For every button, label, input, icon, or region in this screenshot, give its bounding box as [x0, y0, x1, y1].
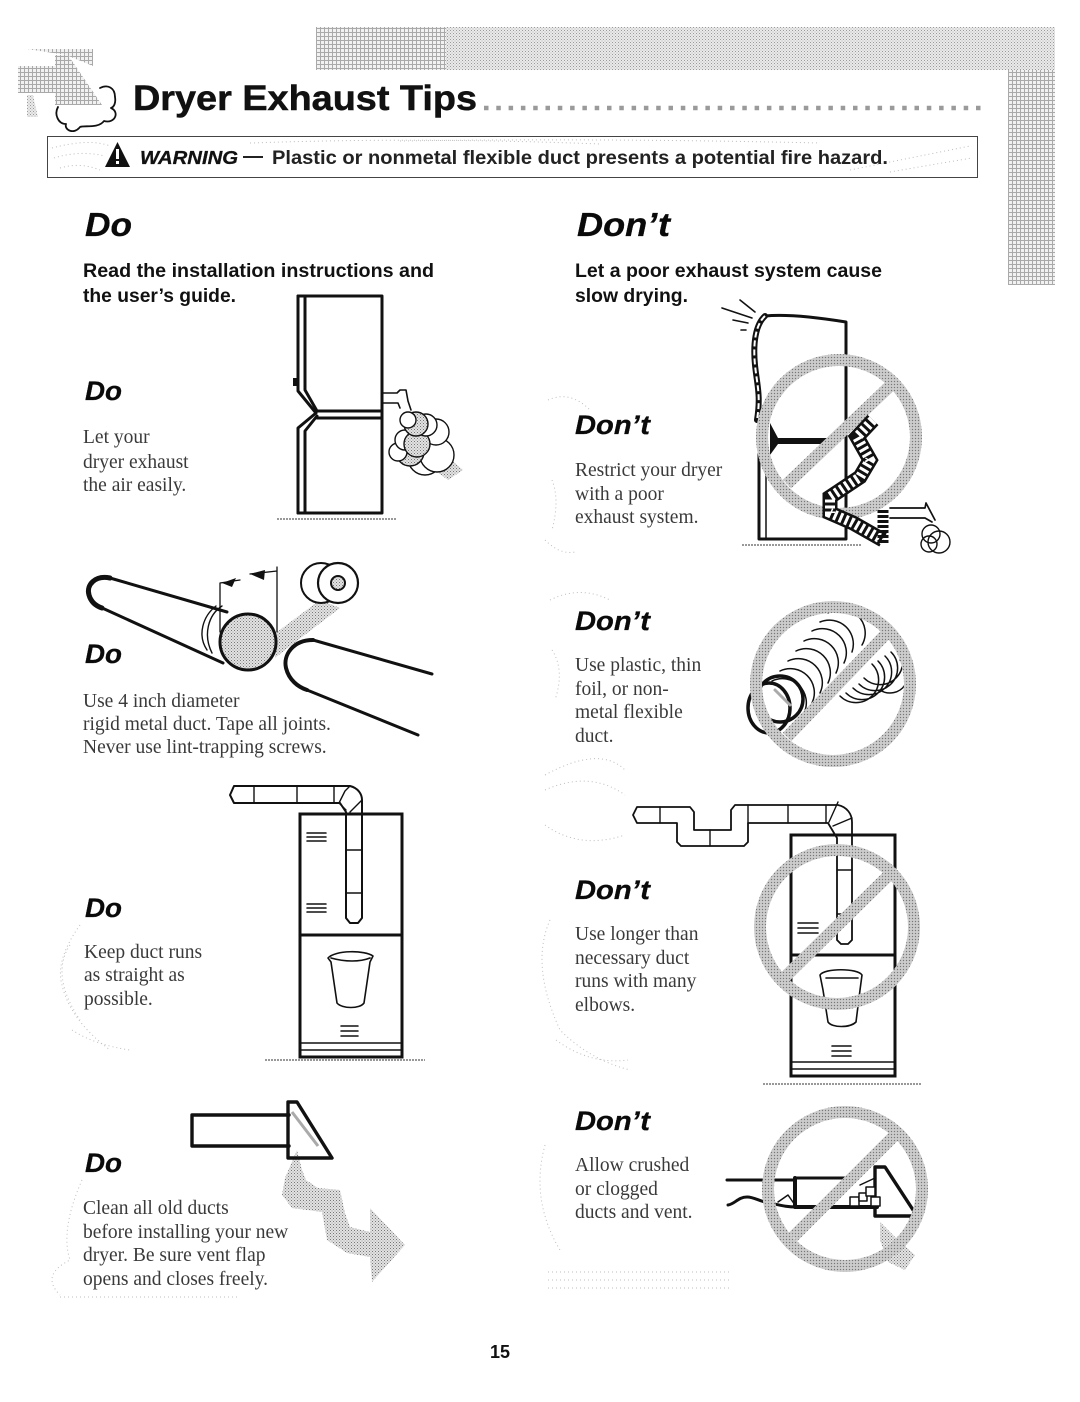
illustration: restricted hose and vent — [830, 420, 950, 553]
text block: Use longer than — [575, 924, 698, 945]
title: Dryer Exhaust Tips — [133, 79, 477, 118]
text block: duct. — [575, 726, 613, 747]
icon: prohibition sign — [756, 607, 910, 761]
heading: Do — [85, 376, 122, 406]
subheading: do column — [83, 261, 434, 307]
illustration: dryer with straight duct — [230, 786, 425, 1060]
text block: dryer. Be sure vent flap — [83, 1245, 265, 1266]
text block: rigid metal duct. Tape all joints. — [83, 714, 331, 735]
text block: as straight as — [84, 965, 185, 986]
panel: do clean ducts — [52, 1102, 405, 1297]
warning label: WARNING — [140, 148, 238, 168]
text block: Keep duct runs — [84, 942, 202, 963]
text block: Use plastic, thin — [575, 655, 701, 676]
panel: do keep ducts straight — [60, 786, 425, 1060]
subheading: don't column — [575, 261, 882, 307]
text block: exhaust system. — [575, 507, 698, 528]
page number: 15 — [490, 1342, 510, 1362]
icon: prohibition sign — [762, 360, 916, 514]
panel: don't use flexible duct — [550, 592, 910, 761]
text block: Restrict your dryer — [575, 460, 722, 481]
heading: Do — [85, 639, 122, 669]
subheading: do column: Read the installation instructions and — [83, 261, 434, 282]
icon: prohibition sign — [768, 1112, 922, 1266]
header band — [316, 27, 1055, 285]
panel: don't restrict — [545, 300, 950, 553]
heading: Don’t — [575, 1106, 651, 1136]
text block: runs with many — [575, 971, 697, 992]
subheading: do column: the user’s guide. — [83, 286, 236, 307]
warning dash — [243, 156, 263, 158]
heading: Don’t — [575, 410, 651, 440]
heading: Don't: Don’t — [577, 206, 672, 243]
text block: dryer exhaust — [83, 452, 189, 473]
illustration: dryer with elbow duct — [633, 802, 922, 1084]
icon: warning triangle — [105, 142, 130, 167]
illustration: dryer with vent — [277, 296, 463, 519]
text block: ducts and vent. — [575, 1202, 693, 1223]
dotted leader — [484, 106, 985, 110]
panel: do use rigid duct — [83, 563, 432, 758]
heading: Do — [85, 1148, 122, 1178]
text block: the air easily. — [83, 475, 186, 496]
text block: metal flexible — [575, 702, 683, 723]
illustration: dryer — [722, 300, 862, 545]
text block: before installing your new — [83, 1222, 288, 1243]
text block: Clean all old ducts — [83, 1198, 229, 1219]
panel: don't use long ducts — [542, 759, 922, 1084]
text block: with a poor — [575, 484, 664, 505]
text block: foil, or non- — [575, 679, 669, 700]
subheading: don't column: Let a poor exhaust system cause — [575, 261, 882, 282]
text block: Use 4 inch diameter — [83, 691, 240, 712]
subheading: don't column: slow drying. — [575, 286, 688, 307]
panel: do let air out — [83, 296, 463, 519]
illustration: vent and air arrow — [192, 1102, 405, 1282]
text block: necessary duct — [575, 948, 690, 969]
heading: Do: Do — [85, 206, 132, 243]
text block: or clogged — [575, 1179, 658, 1200]
heading: Do — [85, 893, 122, 923]
text block: Let your — [83, 427, 150, 448]
icon: vent with cloud — [18, 49, 116, 131]
panel: don't allow crushed ducts — [540, 1106, 922, 1288]
icon: prohibition sign — [760, 850, 914, 1004]
text block: opens and closes freely. — [83, 1269, 268, 1290]
illustration: flexible duct — [748, 609, 908, 733]
text block: possible. — [84, 989, 153, 1010]
text block: Never use lint-trapping screws. — [83, 737, 327, 758]
heading: Don’t — [575, 606, 651, 636]
warning text: Plastic or nonmetal flexible duct presents a potential fire hazard. — [272, 148, 888, 169]
text block: Allow crushed — [575, 1155, 689, 1176]
warning box — [48, 136, 978, 178]
heading: Don’t — [575, 875, 651, 905]
illustration: crushed duct and vent — [727, 1167, 917, 1270]
illustration: duct and tape — [88, 563, 432, 735]
text block: elbows. — [575, 995, 635, 1016]
